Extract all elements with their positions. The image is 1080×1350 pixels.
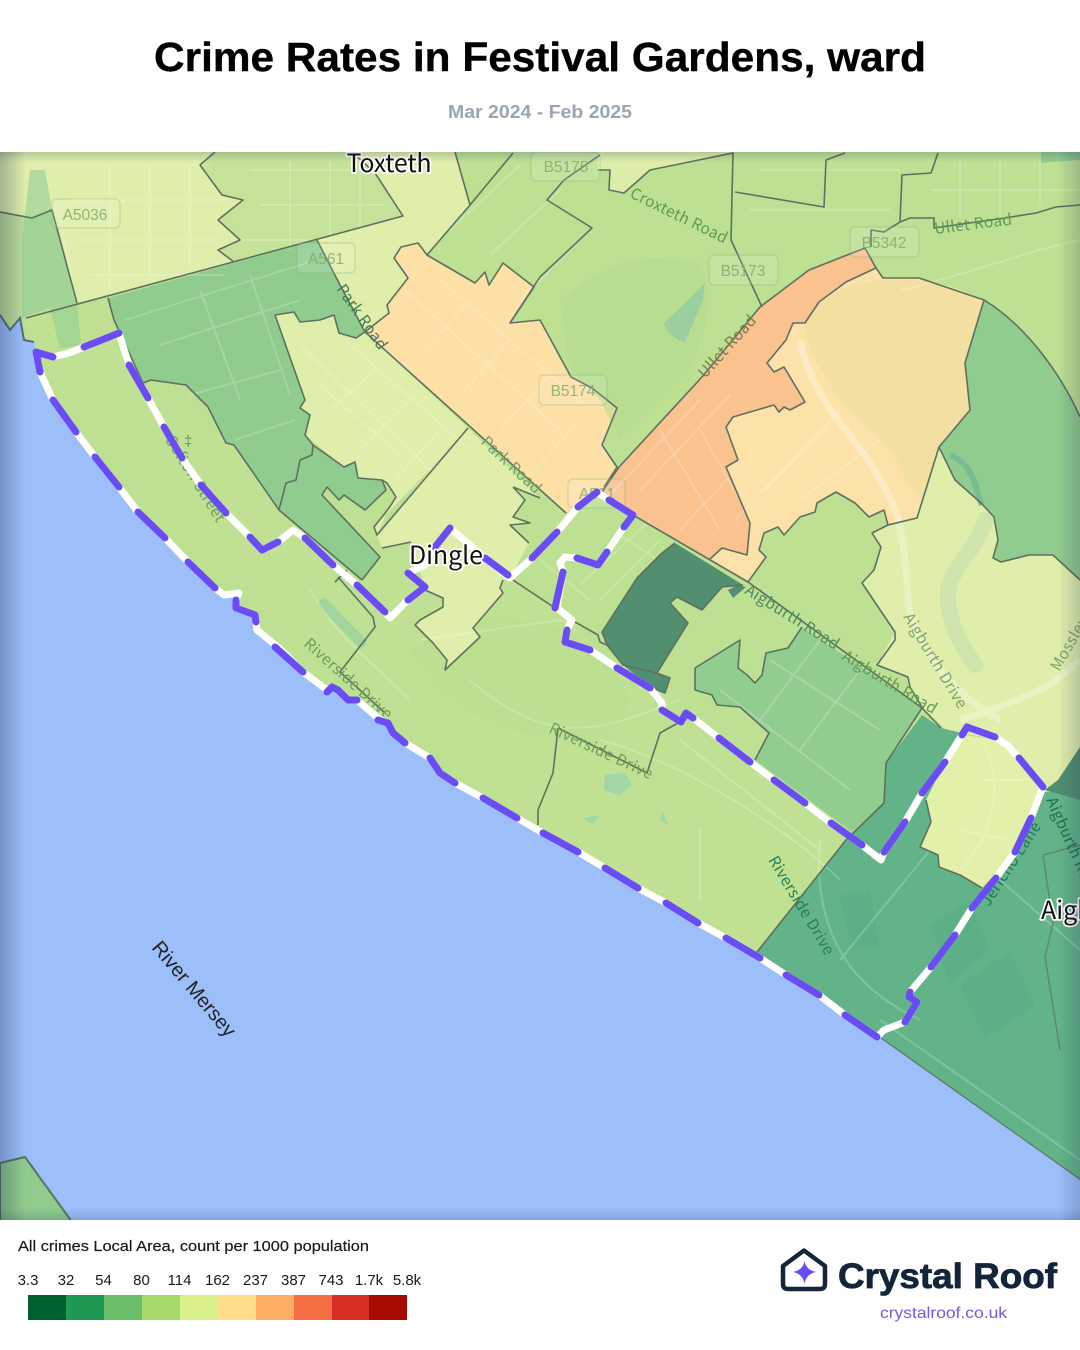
label Aigburth Road north: Aigburth Road [741, 579, 844, 654]
icon: house with star [783, 1250, 825, 1289]
lake on mid green [950, 455, 982, 505]
legend tick labels: 162 [205, 1272, 230, 1289]
region: darkest green block [602, 543, 743, 693]
subtitle: date range: Mar 2024 - Feb 2025 [448, 101, 632, 122]
region: darker green south-east [757, 715, 1080, 1180]
label Riverside Drive centre: Riverside Drive [546, 717, 657, 784]
golf / park tone on riverside [410, 617, 629, 740]
title: Crime Rates in Festival Gardens, ward [154, 34, 926, 80]
label Aigburth Road south: Aigburth Road [838, 644, 942, 719]
legend tick labels: 80 [133, 1272, 150, 1289]
map base land [1, 152, 1080, 954]
legend tick labels: 3.3 [18, 1272, 38, 1289]
region: pale near Croxteth Road [598, 152, 731, 193]
road shields [52, 152, 919, 508]
shield A5036 [52, 199, 120, 228]
shield A561 south [568, 479, 625, 508]
region: dark sliver at east edge [1045, 747, 1080, 800]
label Ullet Road north: Ullet Road [933, 208, 1013, 239]
strip pond near Dingle [324, 604, 361, 642]
street network [60, 160, 1080, 1160]
legend [18, 1238, 422, 1320]
region: docks teal strip [22, 170, 81, 348]
shield A561 south: A561 [579, 486, 615, 503]
region: orange Park Road block [365, 243, 617, 513]
region: docks strip [0, 210, 77, 318]
label River Mersey: River Mersey [147, 937, 240, 1042]
shield B5175 [531, 152, 600, 181]
region: pale Toxteth wedge [317, 150, 470, 332]
legend tick labels: 54 [95, 1272, 112, 1289]
legend tick labels: 114 [168, 1272, 191, 1289]
pond in Princes Park [664, 283, 705, 342]
legend tick labels: 1.7k [355, 1272, 384, 1289]
road labels [161, 182, 1080, 959]
label Aigburth Drive: Aigburth Drive [899, 608, 973, 713]
legend tick labels: 743 [318, 1272, 344, 1289]
Festival Gardens ponds [583, 773, 668, 825]
region: mid green west Dingle [108, 240, 386, 580]
coast edge near docks [0, 315, 34, 342]
shield B5342: B5342 [862, 235, 906, 252]
shield A561 [297, 243, 355, 273]
region: pale central Dingle [275, 312, 468, 535]
shield B5173 [709, 255, 778, 285]
legend title: All crimes Local Area, count per 1000 population [18, 1238, 369, 1255]
label Park Road north: Park Road [332, 279, 394, 354]
label Riverside Drive west: Riverside Drive [300, 632, 398, 724]
region: orange Ullet Road block [602, 248, 876, 560]
purple dashes [36, 333, 1043, 1037]
shield B5342 [850, 227, 919, 257]
region: pale top-left [0, 150, 243, 303]
legend tick labels: 387 [281, 1272, 306, 1289]
ward boundary: white line with purple dashes [36, 333, 1043, 1037]
brand url: crystalroof.co.uk [880, 1305, 1008, 1322]
label Ullet Road west: Ullet Road [692, 309, 761, 382]
park tones and water features [318, 283, 993, 825]
Sefton Park woodland tone [586, 386, 616, 422]
shield A561: A561 [308, 251, 344, 268]
rail station icon: ‡ [184, 433, 192, 450]
label Sefton Street: Sefton Street [161, 431, 232, 526]
shield B5173: B5173 [721, 263, 765, 280]
label Croxteth Road: Croxteth Road [627, 182, 732, 248]
water: River Mersey [0, 315, 1080, 1225]
estate tone at south-east [840, 890, 1035, 1040]
place labels [147, 144, 1080, 1042]
map edge vignette [0, 152, 1080, 1220]
shield A5036: A5036 [63, 207, 107, 224]
stream through Otterspool [948, 520, 985, 665]
legend colour bar [28, 1295, 407, 1320]
label Toxteth: Toxteth [346, 144, 432, 180]
region: pale inside ward eastern lobe [920, 735, 1043, 888]
brand name: Crystal Roof [838, 1257, 1057, 1296]
shield B5175: B5175 [544, 159, 588, 176]
region: pale south Dingle [377, 428, 540, 670]
logo: Crystal Roof [783, 1250, 1057, 1322]
legend tick labels: 237 [243, 1272, 268, 1289]
shield B5174: B5174 [551, 383, 596, 400]
legend tick labels: 5.8k [393, 1272, 422, 1289]
region: darkest green fragment [728, 585, 746, 598]
ward and LSOA boundary lines [0, 150, 1080, 1180]
legend tick labels: 32 [58, 1272, 74, 1289]
legend tick labels [18, 1272, 422, 1289]
region: upper Toxteth green [200, 150, 403, 262]
far bank island [0, 1157, 72, 1222]
region: coastal parkland [26, 298, 881, 952]
label Park Road south: Park Road [477, 431, 547, 499]
park interior of Sefton Park [936, 283, 971, 295]
label Jericho Lane: Jericho Lane [975, 817, 1046, 910]
region: mid green Otterspool edge [939, 300, 1080, 580]
region: top right corner green [1041, 152, 1080, 163]
region: pale yellow Sefton Park block [709, 268, 984, 582]
region: pale Aigburth Drive parkland [862, 447, 1080, 790]
region: mid green Aigburth block [695, 627, 922, 832]
label Riverside Drive east: Riverside Drive [764, 851, 841, 959]
label Dingle: Dingle [409, 536, 483, 572]
white casing [36, 333, 1043, 1037]
shield B5174 [539, 375, 607, 405]
